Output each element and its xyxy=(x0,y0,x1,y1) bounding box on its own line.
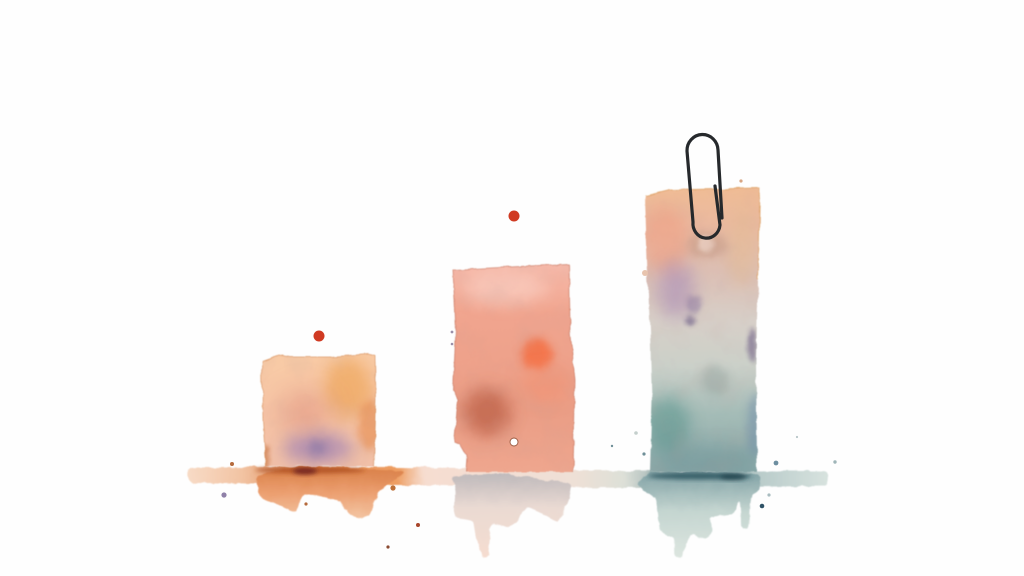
horizontal baseline wash xyxy=(187,467,829,488)
marker dot above bar 2 xyxy=(508,210,520,222)
drips under second bar xyxy=(450,473,572,560)
small paper hole in bar 2 xyxy=(510,438,518,446)
drips under first bar xyxy=(256,466,408,519)
drips under third bar xyxy=(636,472,761,558)
icon: black paperclip xyxy=(687,135,722,238)
marker dot above bar 1 xyxy=(314,330,324,342)
bar 3: tallest multicolour bar xyxy=(640,183,765,478)
bar 2: tall salmon bar xyxy=(452,263,576,473)
bar 1: short orange bar xyxy=(260,352,378,468)
dark paint pool under bar 1 xyxy=(255,466,365,474)
paint splatters xyxy=(221,179,837,549)
watercolor bar chart illustration xyxy=(186,132,837,558)
dark paint pool under bar 3 xyxy=(648,472,752,480)
